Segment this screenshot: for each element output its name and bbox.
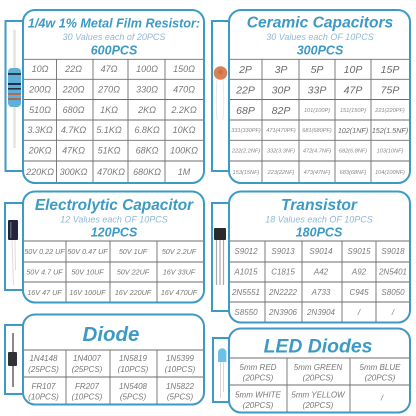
table: ceramic values: 472(4.7NF) bbox=[303, 148, 331, 154]
table: ceramic values: 30P bbox=[272, 84, 290, 96]
table: ceramic values: 82P bbox=[272, 105, 290, 117]
table: diode values: FR207 bbox=[75, 382, 100, 391]
table: ceramic values: 152(1.5NF) bbox=[372, 126, 408, 135]
table: resistor values: 100KΩ bbox=[170, 146, 198, 156]
panel: LED diodes bbox=[213, 328, 410, 412]
table: transistor values: S9012 bbox=[234, 247, 258, 256]
table: transistor values: 2N2222 bbox=[268, 288, 298, 297]
table: LED values: (20PCS) bbox=[243, 374, 274, 382]
table: diode values bbox=[28, 354, 196, 402]
icon: electrolytic capacitor bbox=[8, 220, 18, 285]
table: electrolytic values bbox=[24, 247, 198, 297]
table: diode values: (25PCS) bbox=[28, 365, 59, 374]
table: resistor values: 330Ω bbox=[136, 84, 158, 94]
table: diode values: FR107 bbox=[31, 382, 56, 391]
table: electrolytic values: 16V 470UF bbox=[161, 288, 198, 297]
table: transistor values: A1015 bbox=[233, 268, 258, 276]
table: transistor values: 2N3904 bbox=[306, 308, 336, 317]
table: electrolytic values: 50V 1UF bbox=[119, 247, 148, 256]
table: resistor values: 1KΩ bbox=[100, 105, 118, 115]
table: resistor values: 300KΩ bbox=[60, 167, 88, 177]
table: transistor values: S9013 bbox=[271, 247, 295, 256]
table: ceramic values: 10P bbox=[344, 64, 362, 76]
heading: ceramic capacitors: Ceramic Capacitors bbox=[247, 14, 394, 32]
subtitle: resistor: 30 Values each of 20PCS bbox=[63, 32, 165, 42]
table: ceramic values: 22P bbox=[235, 84, 255, 96]
table: electrolytic values: 50V 10UF bbox=[71, 268, 104, 276]
table: LED values bbox=[235, 363, 401, 410]
table: ceramic values: 151(150P) bbox=[340, 108, 366, 114]
table: ceramic values: 75P bbox=[381, 84, 399, 96]
table: diode values: 1N4007 bbox=[73, 354, 102, 363]
table: resistor values: 100Ω bbox=[136, 64, 158, 74]
table: LED values: 5mm YELLOW bbox=[291, 390, 346, 400]
table: LED values: (20PCS) bbox=[303, 401, 334, 410]
table: LED values: / bbox=[380, 394, 384, 402]
table: ceramic values: 332(3.3NF) bbox=[267, 148, 295, 154]
table: ceramic values: 47P bbox=[344, 84, 362, 96]
heading: transistor: Transistor bbox=[281, 197, 358, 214]
table: transistor values: 2N3906 bbox=[268, 308, 298, 317]
table: electrolytic values: 16V 33UF bbox=[163, 268, 196, 276]
total: transistor: 180PCS bbox=[296, 226, 343, 240]
panel: electrolytic capacitor bbox=[5, 192, 204, 302]
heading: electrolytic capacitor: Electrolytic Capacitor bbox=[35, 197, 194, 214]
table: electrolytic values: 16V 47 UF bbox=[27, 288, 62, 297]
table: diode values: (10PCS) bbox=[165, 365, 196, 374]
table: transistor values: A92 bbox=[351, 268, 367, 276]
table: ceramic values: 104(100NF) bbox=[375, 170, 405, 176]
table: transistor values: / bbox=[391, 308, 395, 317]
table: ceramic values: 68P bbox=[236, 105, 255, 117]
table: LED values: (20PCS) bbox=[365, 374, 396, 382]
table: resistor values: 150Ω bbox=[173, 64, 195, 74]
table: diode values: (10PCS) bbox=[118, 365, 149, 374]
table: ceramic values: 221(220PF) bbox=[374, 108, 405, 114]
table: ceramic values: 223(22NF) bbox=[267, 170, 294, 176]
table: electrolytic values: 16V 220UF bbox=[115, 288, 152, 297]
table: transistor values: / bbox=[357, 308, 361, 317]
heading: resistor: 1/4w 1% Metal Film Resistor: bbox=[28, 16, 200, 30]
table: electrolytic values: 50V 22UF bbox=[117, 268, 150, 276]
total: electrolytic capacitor: 120PCS bbox=[91, 226, 138, 240]
table: resistor values: 510Ω bbox=[29, 105, 51, 115]
table: resistor values: 4.7KΩ bbox=[61, 125, 86, 135]
icon: transistor bbox=[214, 228, 226, 285]
table: resistor values: 22Ω bbox=[64, 64, 82, 74]
table: diode values: 1N5399 bbox=[166, 354, 195, 363]
icon: resistor bbox=[8, 30, 21, 148]
table: resistor values: 270Ω bbox=[97, 84, 120, 94]
table: resistor values: 200Ω bbox=[28, 84, 51, 94]
table: electrolytic values: 50V 0.47 UF bbox=[67, 247, 108, 256]
icon: diode bbox=[8, 333, 17, 387]
table: resistor values: 47KΩ bbox=[62, 146, 85, 156]
table: transistor values: 2N5401 bbox=[378, 268, 407, 276]
table: resistor values: 1M bbox=[178, 167, 191, 177]
table: LED values: 5mm WHITE bbox=[235, 390, 282, 400]
table: ceramic values: 681(680PF) bbox=[302, 128, 332, 134]
table: resistor values: 470KΩ bbox=[97, 167, 125, 177]
table: ceramic values: 682(6.8NF) bbox=[339, 148, 367, 154]
icon: ceramic capacitor bbox=[214, 66, 227, 120]
table: resistor values: 2KΩ bbox=[137, 105, 156, 115]
table: ceramic values: 15P bbox=[381, 64, 399, 76]
panel: resistor bbox=[6, 10, 204, 183]
table: resistor values bbox=[25, 64, 198, 177]
table: ceramic values: 3P bbox=[275, 64, 287, 76]
icon: LED bbox=[218, 348, 226, 398]
table: electrolytic values: 50V 2.2UF bbox=[162, 247, 197, 256]
table: transistor values: S8050 bbox=[381, 288, 405, 297]
table: ceramic values: 2P bbox=[238, 64, 252, 76]
table: resistor values: 2.2KΩ bbox=[170, 105, 197, 115]
table: resistor values: 470Ω bbox=[173, 84, 195, 94]
subtitle: transistor: 18 Values each OF 10PCS bbox=[265, 214, 373, 224]
table: diode values: 1N4148 bbox=[29, 354, 58, 363]
panel: ceramic capacitors bbox=[212, 10, 410, 183]
panel: transistor bbox=[212, 192, 410, 322]
table: electrolytic values: 50V 4.7 UF bbox=[26, 268, 63, 276]
table: diode values: (5PCS) bbox=[120, 392, 146, 402]
table: resistor values: 220KΩ bbox=[25, 167, 54, 177]
table: ceramic values: 102(1NF) bbox=[338, 126, 368, 135]
table: LED values: (20PCS) bbox=[243, 401, 274, 410]
table: resistor values: 3.3KΩ bbox=[27, 125, 53, 135]
table: ceramic values: 473(47NF) bbox=[304, 170, 330, 176]
table: ceramic values: 153(15NF) bbox=[233, 170, 259, 176]
table: transistor values: S9015 bbox=[347, 247, 371, 256]
table: resistor values: 6.8KΩ bbox=[134, 125, 160, 135]
table: ceramic values: 222(2.2NF) bbox=[231, 148, 260, 154]
heading: LED diodes: LED Diodes bbox=[264, 336, 373, 358]
total: ceramic capacitors: 300PCS bbox=[297, 44, 344, 58]
table: electrolytic values: 16V 100UF bbox=[69, 288, 106, 297]
table: diode values: (5PCS) bbox=[167, 392, 193, 402]
total: resistor: 600PCS bbox=[91, 44, 138, 58]
table: transistor values: S9014 bbox=[309, 247, 333, 256]
table: transistor values bbox=[231, 247, 407, 317]
table: transistor values: A733 bbox=[311, 288, 331, 297]
table: ceramic values bbox=[231, 64, 408, 176]
table: electrolytic values: 50V 0.22 UF bbox=[24, 247, 65, 256]
table: resistor values: 10Ω bbox=[32, 64, 49, 74]
table: transistor values: S8550 bbox=[234, 308, 258, 317]
table: transistor values: C1815 bbox=[271, 268, 295, 276]
table: diode values: 1N5822 bbox=[166, 382, 195, 391]
table: resistor values: 220Ω bbox=[62, 84, 85, 94]
table: transistor values: C945 bbox=[349, 288, 369, 297]
table: LED values: (20PCS) bbox=[303, 374, 334, 382]
panel: diode bbox=[5, 314, 204, 404]
table: diode values: 1N5408 bbox=[119, 382, 148, 391]
table: resistor values: 10KΩ bbox=[173, 125, 196, 135]
table: ceramic values: 101(100P) bbox=[304, 108, 330, 114]
table: diode values: (10PCS) bbox=[72, 392, 103, 402]
table: resistor values: 5.1KΩ bbox=[96, 125, 122, 135]
heading: diode: Diode bbox=[83, 323, 139, 346]
table: ceramic values: 331(330PF) bbox=[231, 128, 261, 134]
subtitle: ceramic capacitors: 30 Values each OF 10PCS bbox=[266, 32, 374, 42]
table: transistor values: A42 bbox=[313, 268, 329, 276]
table: ceramic values: 683(68NF) bbox=[340, 170, 366, 176]
table: ceramic values: 33P bbox=[308, 84, 326, 96]
table: diode values: (10PCS) bbox=[28, 392, 59, 402]
table: resistor values: 680KΩ bbox=[133, 167, 161, 177]
table: transistor values: 2N5551 bbox=[231, 288, 260, 297]
table: ceramic values: 471(470PF) bbox=[266, 128, 296, 134]
table: ceramic values: 103(10NF) bbox=[377, 148, 403, 154]
subtitle: electrolytic capacitor: 12 Values each OF 10PCS bbox=[60, 214, 168, 224]
table: resistor values: 51KΩ bbox=[98, 146, 121, 156]
table: LED values: 5mm BLUE bbox=[360, 363, 401, 372]
table: LED values: 5mm GREEN bbox=[294, 363, 342, 372]
table: transistor values: S9018 bbox=[381, 247, 405, 256]
table: resistor values: 47Ω bbox=[101, 64, 118, 74]
table: resistor values: 680Ω bbox=[63, 105, 85, 115]
table: resistor values: 68KΩ bbox=[136, 146, 159, 156]
table: ceramic values: 5P bbox=[311, 64, 323, 76]
table: diode values: 1N5819 bbox=[119, 354, 148, 363]
table: LED values: 5mm RED bbox=[240, 363, 277, 372]
table: diode values: (25PCS) bbox=[72, 365, 103, 374]
table: resistor values: 20KΩ bbox=[28, 146, 52, 156]
